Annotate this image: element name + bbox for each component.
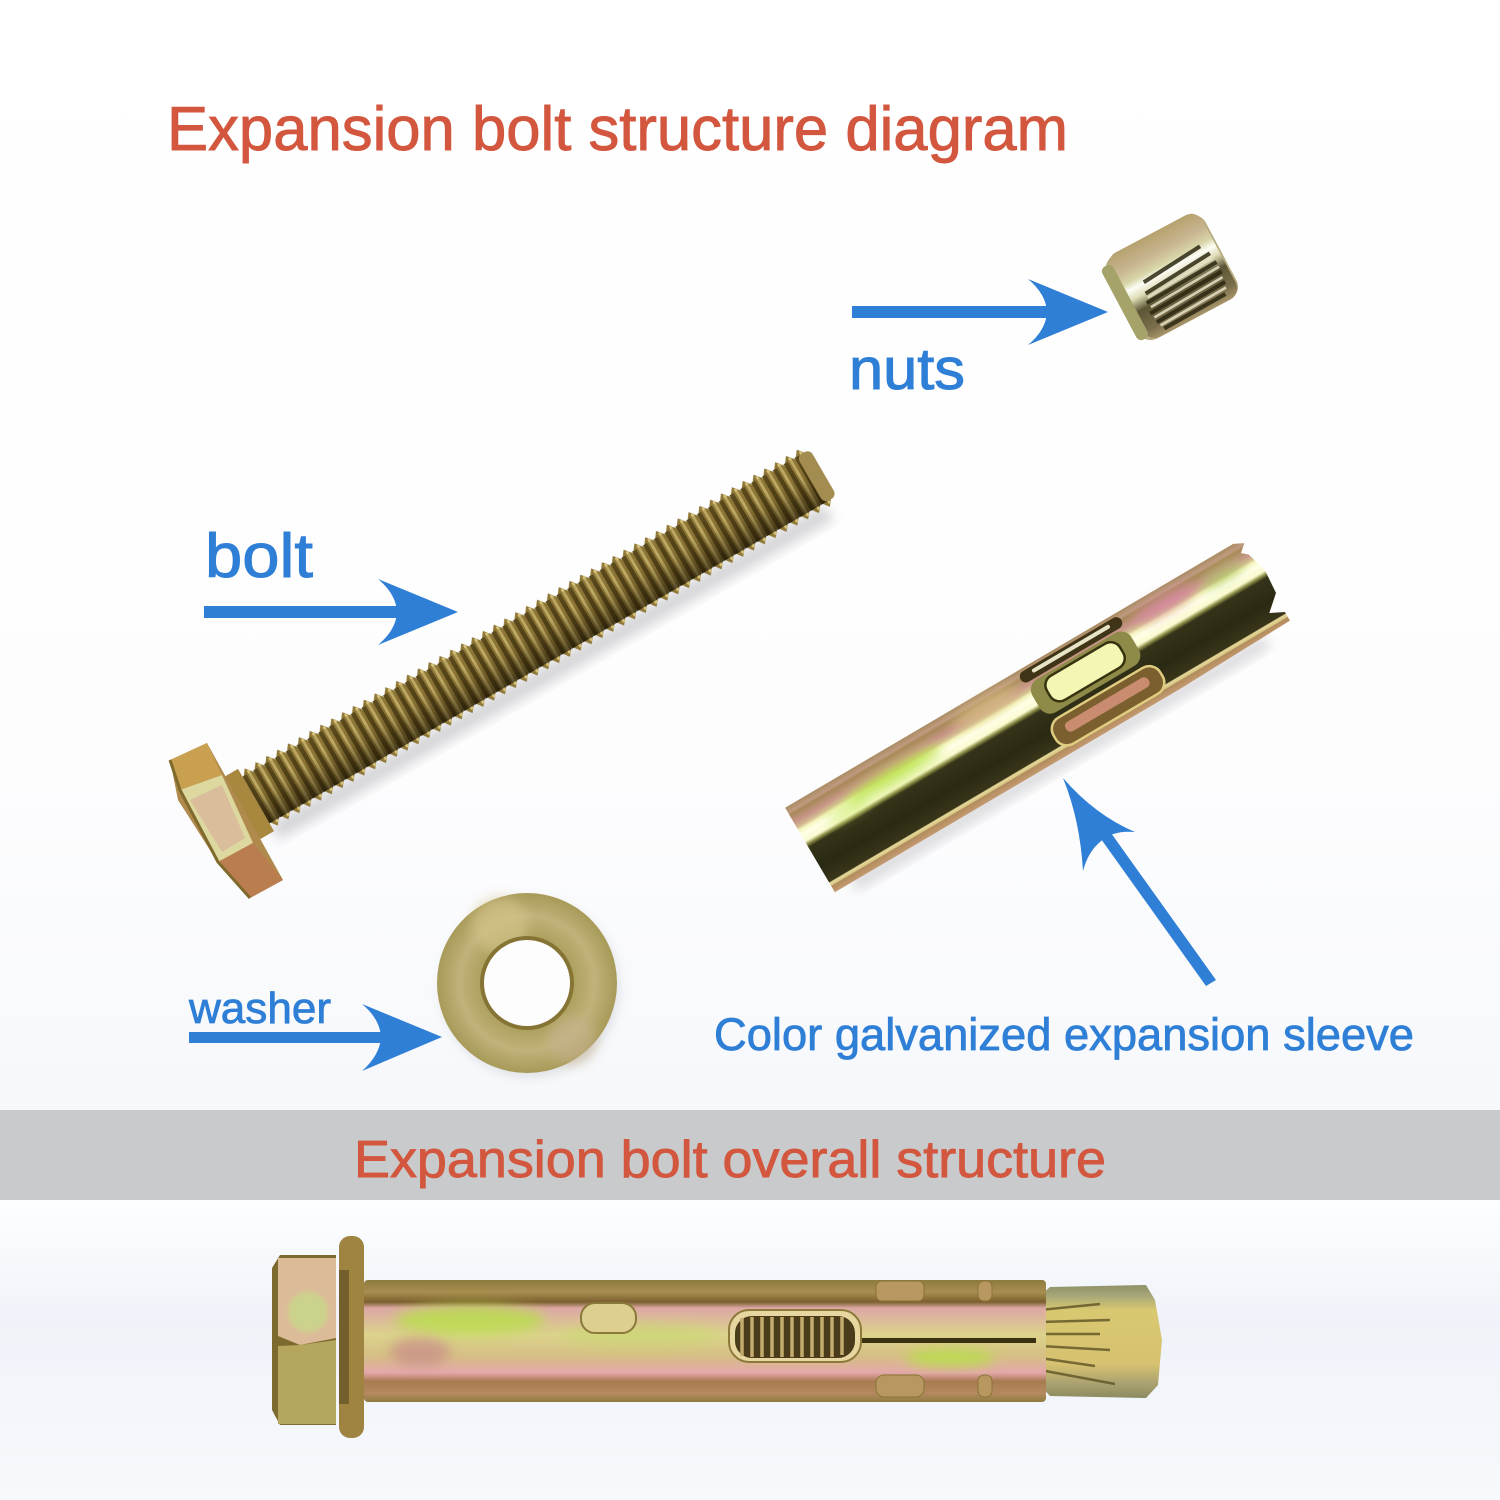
title: Expansion bolt structure diagram (167, 95, 1068, 164)
lower slot (1047, 661, 1169, 750)
label: washer: washer (188, 984, 331, 1033)
band: overall structure heading: Expansion bolt overall structure (354, 1131, 1106, 1189)
icon: washer (437, 893, 618, 1076)
label: bolt: bolt (205, 522, 313, 591)
sleeve colour patches (815, 550, 1252, 826)
icon: assembled expansion bolt (272, 1236, 1162, 1438)
band: overall structure heading (0, 1110, 1500, 1200)
bumps (876, 1281, 992, 1397)
arrow: to bolt (204, 579, 458, 645)
bent tab (1026, 627, 1145, 718)
nut end (1035, 1285, 1162, 1398)
sleeve body (364, 1280, 1046, 1402)
label: expansion sleeve: Color galvanized expansion sleeve (714, 1009, 1414, 1060)
lower background (0, 1200, 1500, 1500)
washer shading (339, 1270, 349, 1404)
label: nuts: nuts (849, 337, 965, 402)
arrow: to sleeve (1063, 778, 1216, 986)
icon: nut (1097, 208, 1243, 347)
arrow: to nuts (852, 279, 1108, 345)
spring washer (339, 1236, 364, 1438)
icon: expansion sleeve (785, 537, 1300, 901)
page background (0, 0, 1500, 1110)
hex head (272, 1255, 336, 1425)
upper slit (1018, 615, 1124, 685)
arrow: to washer (189, 1004, 442, 1071)
icon: bolt (170, 441, 846, 898)
slot with threads (729, 1310, 861, 1362)
slit (862, 1338, 1036, 1343)
oval dimple (581, 1303, 636, 1333)
